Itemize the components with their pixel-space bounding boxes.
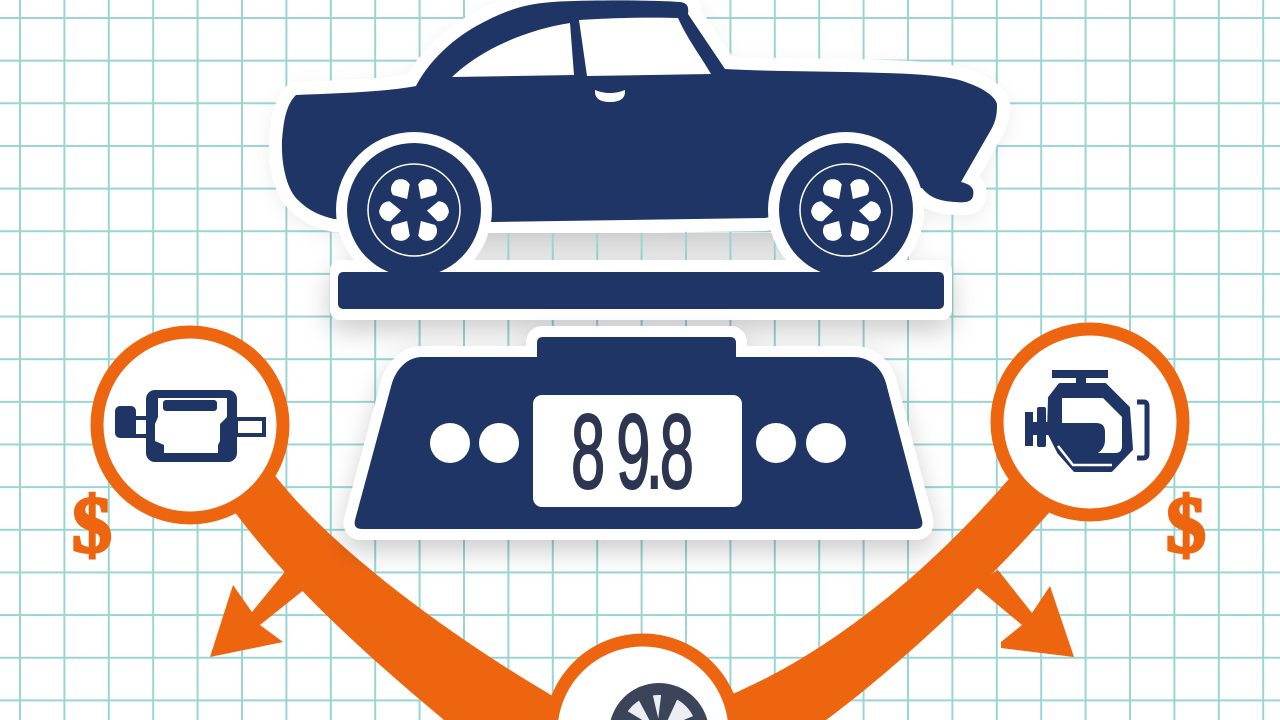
white sticker outline of car xyxy=(282,0,997,288)
down arrow right xyxy=(974,570,1074,657)
display screen xyxy=(533,395,742,507)
icon: transmission motor xyxy=(115,390,264,462)
dollar sign left: $ xyxy=(72,482,112,570)
scale buttons right xyxy=(756,423,846,463)
weight readout: 8 xyxy=(660,394,694,511)
right component badge xyxy=(997,329,1183,515)
scale body xyxy=(355,337,922,529)
white sticker outline of platform xyxy=(330,260,952,320)
weight readout: 9 xyxy=(616,394,650,511)
icon: tire xyxy=(609,683,709,720)
car body xyxy=(282,0,997,222)
front wheel arch xyxy=(768,132,924,288)
bottom component badge xyxy=(551,640,735,720)
scale buttons left xyxy=(430,423,519,463)
left component badge xyxy=(97,332,283,518)
orange curved connector left xyxy=(225,462,556,720)
orange curved connector right xyxy=(728,462,1060,720)
digital scale xyxy=(355,337,922,529)
rear wheel xyxy=(347,143,481,277)
door handle xyxy=(595,90,625,102)
rear side window xyxy=(452,23,574,77)
weight readout: 8 xyxy=(571,394,605,511)
platform bar xyxy=(338,272,944,309)
front wheel xyxy=(779,143,913,277)
dollar sign right: $ xyxy=(1166,482,1206,570)
car illustration xyxy=(282,0,997,309)
down arrow left xyxy=(210,568,310,657)
shaded gap under the car xyxy=(470,233,786,263)
icon: engine xyxy=(1025,370,1147,470)
rear wheel arch xyxy=(336,132,492,288)
front side window xyxy=(579,18,711,76)
weight readout: . xyxy=(646,394,663,511)
scale sticker outline xyxy=(355,337,922,529)
